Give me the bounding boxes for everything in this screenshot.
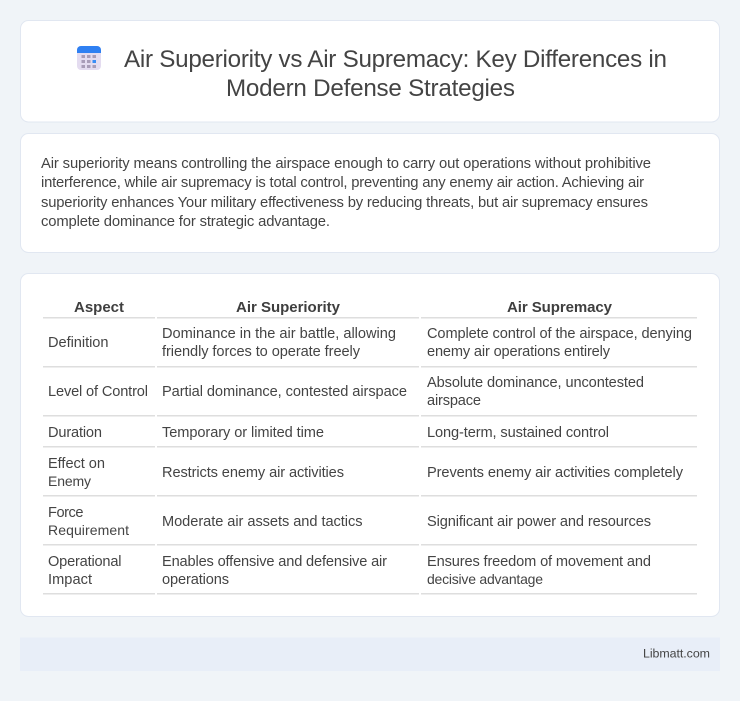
row: duration: Long-term, sustained control bbox=[427, 425, 609, 441]
row: duration bbox=[48, 425, 609, 441]
panel: comparison table bbox=[20, 274, 720, 616]
text block: introduction: superiority enhances Your military effectiveness by reducing threats, but air supremacy ensures bbox=[41, 195, 648, 211]
table header row: Air Supremacy bbox=[507, 299, 613, 316]
row: level of control: Partial dominance, contested airspace bbox=[162, 384, 407, 400]
row: effect on enemy: Effect on bbox=[48, 456, 105, 472]
row: level of control bbox=[48, 375, 644, 409]
row: duration: Duration bbox=[48, 425, 102, 441]
row: operational impact: Impact bbox=[48, 572, 92, 588]
title: Modern Defense Strategies bbox=[226, 75, 515, 102]
row: definition: enemy air operations entirely bbox=[427, 344, 611, 360]
row: operational impact: decisive advantage bbox=[427, 571, 543, 587]
footer: Libmatt.com bbox=[643, 646, 710, 660]
row: definition: Definition bbox=[48, 335, 108, 351]
row: level of control: airspace bbox=[427, 393, 481, 409]
row: operational impact: Ensures freedom of movement and bbox=[427, 554, 651, 570]
row: force requirement: Moderate air assets and tactics bbox=[162, 514, 362, 530]
row: effect on enemy: Restricts enemy air activities bbox=[162, 465, 344, 481]
text block: introduction bbox=[41, 156, 651, 230]
row: operational impact: operations bbox=[162, 572, 229, 588]
title: Air Superiority vs Air Supremacy: Key Differences in bbox=[124, 46, 667, 73]
table header row: Aspect bbox=[74, 299, 124, 316]
row: definition: Dominance in the air battle, allowing bbox=[162, 326, 396, 342]
row: definition: friendly forces to operate freely bbox=[162, 344, 361, 360]
row: operational impact: Operational bbox=[48, 554, 122, 570]
footer bbox=[20, 638, 720, 671]
row: effect on enemy bbox=[48, 456, 684, 489]
row: definition bbox=[48, 326, 692, 360]
icon: calendar bbox=[77, 46, 101, 70]
row: effect on enemy: Prevents enemy air activities completely bbox=[427, 465, 684, 481]
text block: introduction: Air superiority means controlling the airspace enough to carry out operations without prohibitive bbox=[41, 156, 651, 172]
row: effect on enemy: Enemy bbox=[48, 473, 91, 489]
table header row bbox=[74, 299, 613, 316]
table header row: Air Superiority bbox=[236, 299, 341, 316]
row: force requirement: Significant air power and resources bbox=[427, 514, 651, 530]
row: level of control: Absolute dominance, uncontested bbox=[427, 375, 644, 391]
row: operational impact bbox=[48, 554, 651, 588]
row: level of control: Level of Control bbox=[48, 384, 148, 400]
panel: header bbox=[20, 20, 720, 122]
row: operational impact: Enables offensive and defensive air bbox=[162, 554, 387, 570]
row: duration: Temporary or limited time bbox=[162, 425, 324, 441]
title bbox=[124, 46, 667, 102]
row: force requirement: Force bbox=[48, 505, 84, 521]
text block: introduction: complete dominance for strategic advantage. bbox=[41, 214, 330, 230]
row: definition: Complete control of the airspace, denying bbox=[427, 326, 692, 342]
row: force requirement: Requirement bbox=[48, 522, 129, 538]
row: force requirement bbox=[48, 505, 651, 538]
panel: introduction bbox=[20, 134, 720, 252]
text block: introduction: interference, while air supremacy is total control, preventing any enemy air action. Achieving air bbox=[41, 175, 644, 191]
